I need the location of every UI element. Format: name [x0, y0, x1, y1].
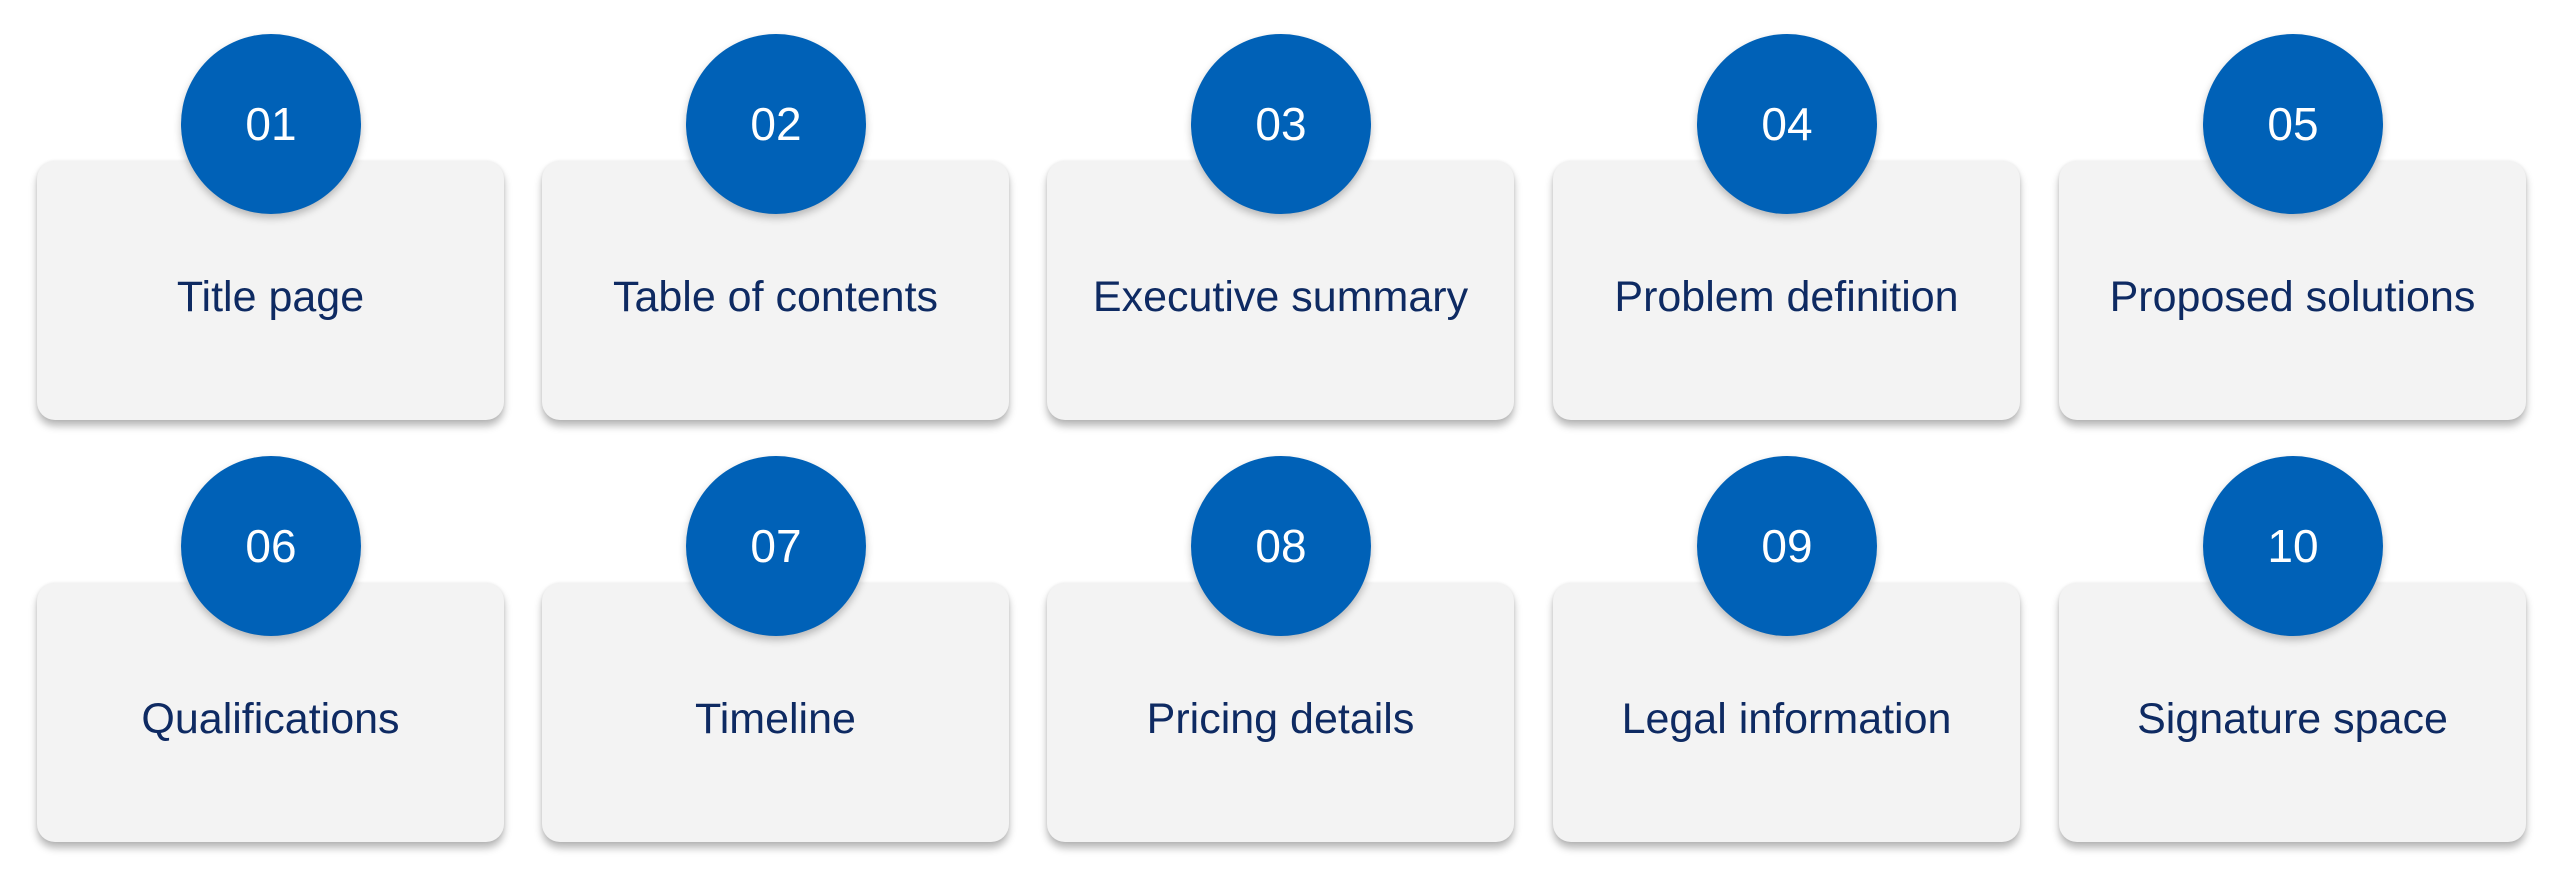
item 05 [2054, 34, 2530, 430]
item 03: 03 [1255, 98, 1307, 150]
item 02 [538, 34, 1014, 430]
item 07: 07 [750, 520, 802, 572]
item 10: 10 [2267, 520, 2319, 572]
item 06: Qualifications [141, 695, 400, 743]
item 03 [1042, 34, 1518, 430]
item 08: Pricing details [1147, 695, 1414, 743]
item 07: Timeline [695, 695, 856, 743]
item 03: Executive summary [1093, 273, 1468, 321]
item 04 [1548, 34, 2024, 430]
item 09: 09 [1761, 520, 1813, 572]
item 10: Signature space [2137, 695, 2448, 743]
item 07 [538, 456, 1014, 852]
item 06 [32, 456, 508, 852]
item 08: 08 [1255, 520, 1307, 572]
item 05: Proposed solutions [2110, 273, 2475, 321]
item 09 [1548, 456, 2024, 852]
item 06: 06 [245, 520, 297, 572]
item 01: 01 [245, 98, 297, 150]
item 01: Title page [177, 273, 364, 321]
item 08 [1042, 456, 1518, 852]
item 02: Table of contents [613, 273, 938, 321]
item 04: 04 [1761, 98, 1813, 150]
item 01 [32, 34, 508, 430]
item 05: 05 [2267, 98, 2319, 150]
item 10 [2054, 456, 2530, 852]
item 09: Legal information [1622, 695, 1951, 743]
item 02: 02 [750, 98, 802, 150]
item 04: Problem definition [1614, 273, 1959, 321]
